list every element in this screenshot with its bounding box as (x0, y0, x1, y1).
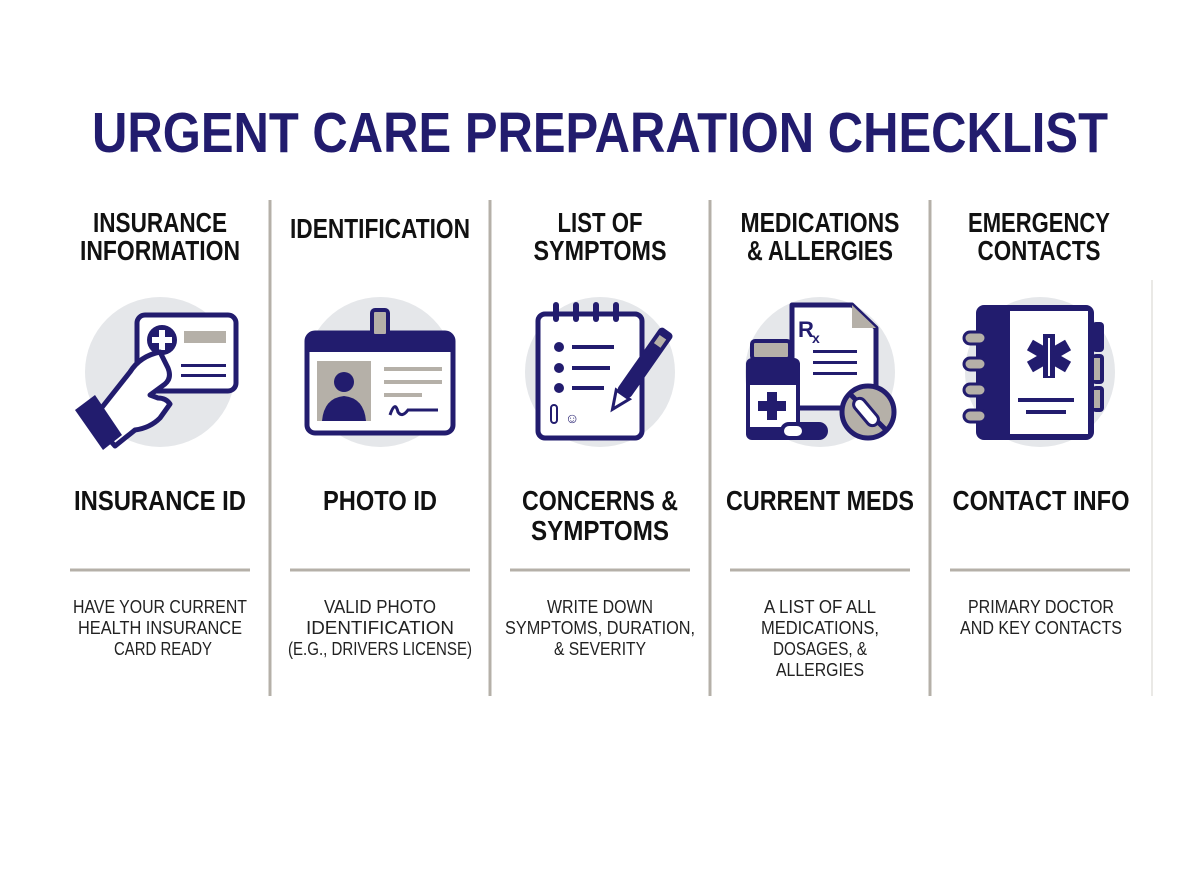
heading: medications & allergies: MEDICATIONS (740, 207, 900, 238)
heading: emergency contacts: EMERGENCY (968, 207, 1110, 238)
heading: list of symptoms (534, 207, 666, 266)
icon: hand holding insurance card (75, 297, 236, 450)
heading: insurance information (80, 207, 240, 266)
description (761, 597, 879, 680)
subheading: concerns & symptoms (522, 485, 678, 546)
description: DOSAGES, & (773, 639, 867, 659)
heading: list of symptoms: LIST OF (558, 207, 642, 238)
subheading: concerns & symptoms: SYMPTOMS (531, 515, 669, 546)
heading: medications & allergies: & ALLERGIES (747, 235, 893, 266)
description: AND KEY CONTACTS (960, 618, 1122, 638)
description (73, 597, 247, 659)
description: IDENTIFICATION (306, 618, 454, 638)
icon: notepad with pen: ☺ (565, 410, 579, 426)
description: A LIST OF ALL (764, 597, 876, 617)
description: SYMPTOMS, DURATION, (505, 618, 695, 638)
description: (E.G., DRIVERS LICENSE) (288, 639, 472, 659)
description: & SEVERITY (554, 639, 646, 659)
panel: identification (288, 213, 472, 659)
subheading: contact info: CONTACT INFO (952, 485, 1130, 516)
description (505, 597, 695, 659)
icon: notepad with pen (525, 297, 675, 447)
panel: symptoms (505, 207, 695, 659)
panel: insurance (73, 207, 247, 659)
heading: list of symptoms: SYMPTOMS (534, 235, 666, 266)
icon: medicine bottle, prescription, allergy (745, 297, 895, 447)
subheading: photo id: PHOTO ID (323, 485, 437, 516)
description: HAVE YOUR CURRENT (73, 597, 247, 617)
heading: insurance information: INFORMATION (80, 235, 240, 266)
description: HEALTH INSURANCE (78, 618, 242, 638)
description (960, 597, 1122, 638)
description (288, 597, 472, 659)
icon: medicine bottle, prescription, allergy: R (798, 317, 814, 342)
description: PRIMARY DOCTOR (968, 597, 1114, 617)
description: ALLERGIES (776, 660, 864, 680)
description: WRITE DOWN (547, 597, 653, 617)
heading: identification: IDENTIFICATION (290, 213, 470, 244)
description: VALID PHOTO (324, 597, 436, 617)
icon: photo id badge (305, 297, 455, 447)
subheading: insurance id: INSURANCE ID (74, 485, 246, 516)
heading: medications & allergies (740, 207, 900, 266)
heading: insurance information: INSURANCE (93, 207, 227, 238)
panel: medications (726, 207, 914, 680)
icon: medicine bottle, prescription, allergy: x (812, 330, 820, 346)
heading: emergency contacts (968, 207, 1110, 266)
description: CARD READY (114, 639, 212, 659)
description: MEDICATIONS, (761, 618, 879, 638)
heading: emergency contacts: CONTACTS (978, 235, 1100, 266)
icon: medical contact book (964, 297, 1115, 447)
subheading: concerns & symptoms: CONCERNS & (522, 485, 678, 516)
panel: emergency contacts (952, 207, 1130, 638)
subheading: current meds: CURRENT MEDS (726, 485, 914, 516)
